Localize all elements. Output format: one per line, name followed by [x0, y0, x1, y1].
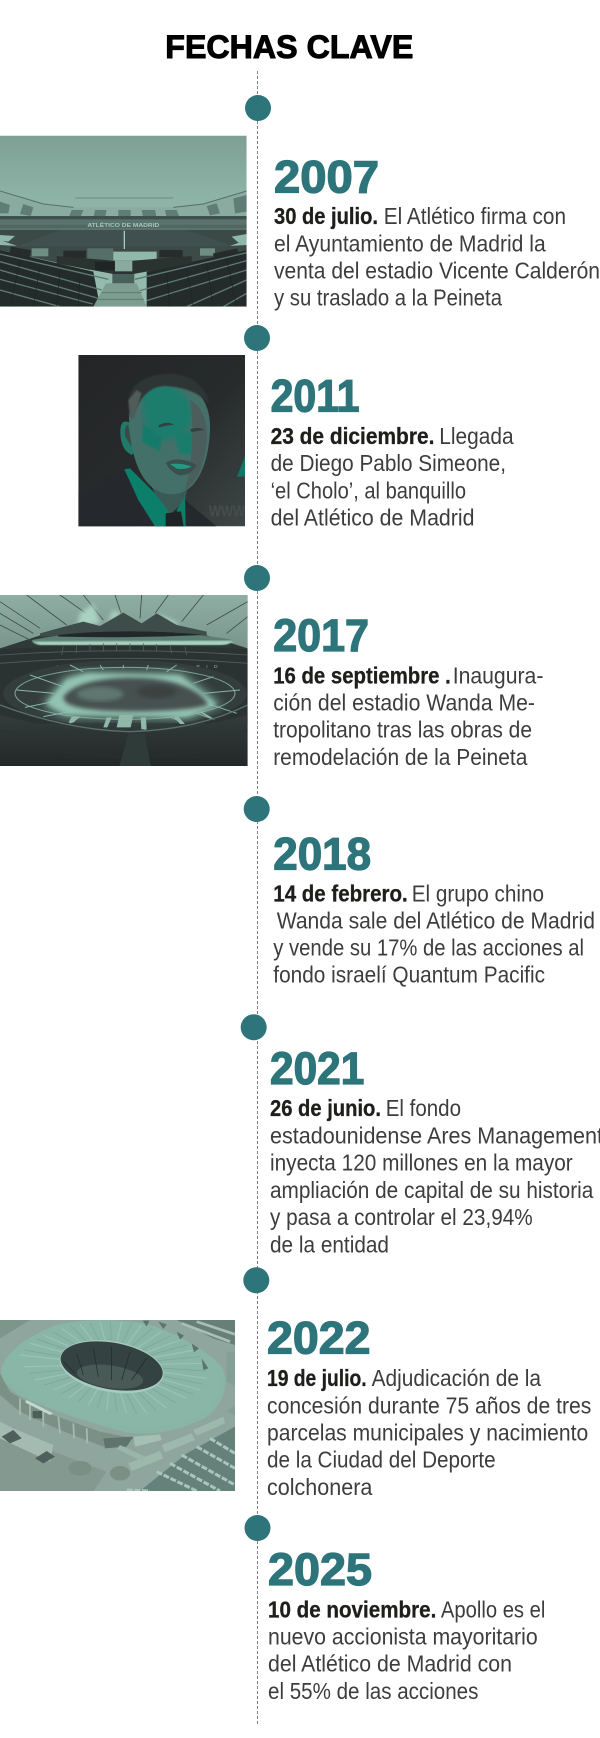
description 2025: el 55% de las acciones — [268, 1678, 478, 1704]
photo: Wanda Metropolitano aerial: ATLÉTICO DE MADRID — [56, 663, 218, 670]
description 2025 — [268, 1596, 545, 1704]
year 2025: 2025 — [268, 1544, 372, 1595]
year 2011: 2011 — [271, 371, 360, 422]
entry: 2022 — [267, 1312, 591, 1500]
description 2017: ción del estadio Wanda Me- — [273, 690, 535, 716]
circle 2018 — [244, 796, 270, 822]
circle 2025 — [244, 1515, 270, 1541]
timeline dashed line — [256, 71, 258, 1724]
description 2011: de Diego Pablo Simeone, — [271, 450, 506, 476]
description 2025: del Atlético de Madrid con — [268, 1651, 512, 1677]
circle 2011 — [244, 325, 270, 351]
photo: Ciudad del Deporte model — [0, 1320, 235, 1491]
description 2011: Llegada — [439, 423, 514, 449]
circle 2007 — [245, 95, 271, 121]
entry: 2011 — [271, 371, 514, 531]
description 2007: El Atlético firma con — [384, 203, 566, 229]
description 2025: 10 de noviembre. — [268, 1596, 436, 1622]
description 2022 — [267, 1365, 591, 1500]
description 2021: y pasa a controlar el 23,94% — [270, 1204, 533, 1230]
description 2018: El grupo chino — [412, 881, 544, 907]
description 2021 — [270, 1095, 600, 1257]
description 2011: ‘el Cholo’, al banquillo — [271, 477, 466, 503]
description 2022: 19 de julio. — [267, 1365, 367, 1391]
photo: Diego Simeone portrait: WWW — [209, 504, 245, 521]
description 2011 — [271, 423, 514, 531]
description 2017: Inaugura- — [453, 662, 543, 688]
entry: 2021 — [270, 1043, 600, 1257]
description 2025: Apollo es el — [441, 1596, 545, 1622]
description 2011: 23 de diciembre. — [271, 423, 434, 449]
title: FECHAS CLAVE — [165, 29, 413, 65]
description 2017 — [273, 662, 543, 770]
photo: Wanda Metropolitano aerial — [0, 595, 248, 766]
year 2017: 2017 — [273, 610, 369, 661]
entry: 2018 — [273, 828, 595, 988]
entry: 2007 — [274, 152, 600, 310]
year 2018: 2018 — [273, 828, 371, 879]
description 2021: de la entidad — [270, 1231, 389, 1257]
entry: 2017 — [273, 610, 543, 770]
description 2007: el Ayuntamiento de Madrid la — [274, 230, 546, 256]
description 2007: 30 de julio. — [274, 203, 378, 229]
description 2018: fondo israelí Quantum Pacific — [273, 962, 545, 988]
description 2017: tropolitano tras las obras de — [273, 717, 532, 743]
circle 2021 — [241, 1014, 267, 1040]
photo: Vicente Calderón stadium: ATLÉTICO DE MADRID — [87, 221, 160, 229]
circle 2022 — [243, 1267, 269, 1293]
description 2022: de la Ciudad del Deporte — [267, 1447, 496, 1473]
year 2021: 2021 — [270, 1043, 364, 1094]
description 2025: nuevo accionista mayoritario — [268, 1624, 538, 1650]
circle 2017 — [244, 565, 270, 591]
year 2007: 2007 — [274, 152, 379, 203]
description 2022: colchonera — [267, 1474, 373, 1500]
description 2021: 26 de junio. — [270, 1095, 381, 1121]
description 2017: 16 de septiembre . — [273, 662, 451, 688]
description 2022: Adjudicación de la — [372, 1365, 541, 1391]
description 2007: y su traslado a la Peineta — [274, 284, 502, 310]
entry: 2025 — [268, 1544, 545, 1704]
description 2007 — [274, 203, 600, 310]
description 2021: inyecta 120 millones en la mayor — [270, 1150, 573, 1176]
description 2021: El fondo — [386, 1095, 461, 1121]
description 2018 — [273, 881, 595, 988]
year 2022: 2022 — [267, 1312, 370, 1363]
description 2011: del Atlético de Madrid — [271, 505, 474, 531]
description 2017: remodelación de la Peineta — [273, 744, 528, 770]
photo: Diego Simeone portrait — [78, 355, 245, 526]
description 2018: 14 de febrero. — [273, 881, 408, 907]
photo: Vicente Calderón stadium — [0, 136, 247, 307]
